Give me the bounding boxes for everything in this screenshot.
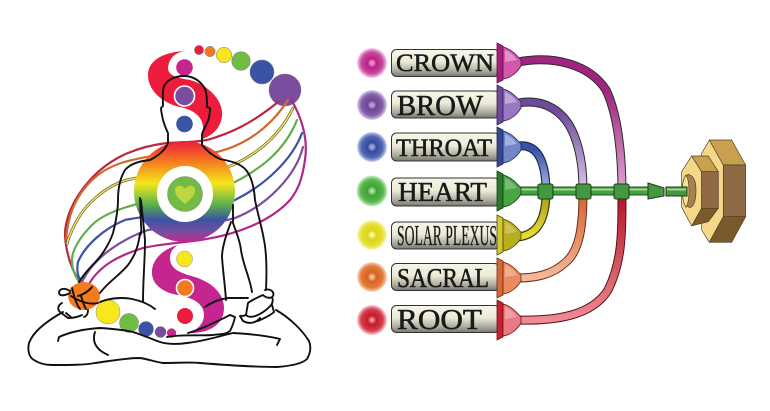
seated body outline xyxy=(28,76,310,367)
root chakra xyxy=(177,308,193,324)
sacral label bar xyxy=(392,264,500,290)
red upper S swirl xyxy=(148,51,222,139)
rainbow energy ribbons xyxy=(65,99,306,284)
row: solar plexus xyxy=(357,215,521,255)
sacral end cap xyxy=(497,258,521,298)
bead trail from hand xyxy=(96,300,176,338)
brow label: BROW xyxy=(397,90,484,122)
sacral label: SACRAL xyxy=(397,263,489,293)
row: root xyxy=(357,300,521,340)
solar plexus end cap xyxy=(497,215,521,255)
heart orb xyxy=(356,176,388,206)
icon: heart xyxy=(175,186,195,204)
crown end cap xyxy=(497,43,521,83)
rainbow chest circle xyxy=(134,141,235,242)
brow end cap xyxy=(497,85,521,125)
sacral chakra ring xyxy=(176,280,194,296)
crown orb xyxy=(357,48,387,78)
large nut xyxy=(702,140,746,242)
orange ball in hand xyxy=(68,282,100,310)
brow orb xyxy=(357,90,387,120)
collars and arrow fitting xyxy=(538,183,664,199)
throat label bar xyxy=(392,133,500,161)
row: throat xyxy=(357,127,521,167)
row: solar plexus: SOLAR PLEXUS xyxy=(397,221,497,252)
heart label bar xyxy=(392,178,500,206)
solar plexus chakra xyxy=(176,251,192,267)
row: crown xyxy=(357,43,521,83)
brass nut fitting xyxy=(682,140,746,242)
throat chakra xyxy=(176,116,193,132)
heart chakra disc xyxy=(168,176,202,212)
small nut xyxy=(682,156,718,226)
tube: brow to sacral xyxy=(518,102,583,278)
throat label: THROAT xyxy=(396,135,492,162)
throat orb xyxy=(357,132,387,162)
magenta crown chakra xyxy=(176,59,193,76)
trunk tip entering nut xyxy=(666,187,687,196)
solar plexus orb xyxy=(357,220,387,250)
heart end cap xyxy=(497,171,521,211)
crown label bar xyxy=(392,50,500,76)
root label: ROOT xyxy=(397,304,482,336)
main green trunk tube xyxy=(517,183,664,199)
row: sacral xyxy=(357,258,521,298)
root label bar xyxy=(392,306,500,332)
root end cap xyxy=(497,300,521,340)
magenta lower S swirl xyxy=(152,245,224,333)
root orb xyxy=(357,305,387,335)
crown label: CROWN xyxy=(396,50,494,77)
row: brow xyxy=(357,85,521,125)
brow chakra ring xyxy=(174,86,194,106)
heart label: HEART xyxy=(398,177,488,207)
brow label bar xyxy=(392,91,500,118)
connecting tubes xyxy=(517,60,664,320)
solar plexus label bar xyxy=(392,222,500,249)
tube: crown to root xyxy=(518,60,622,320)
row: heart xyxy=(356,171,521,211)
top chakra bead arc xyxy=(194,45,301,106)
tube: throat to solar plexus xyxy=(518,146,546,237)
throat end cap xyxy=(497,127,521,167)
white ring xyxy=(157,166,213,222)
chakra figure xyxy=(28,45,310,367)
sacral orb xyxy=(357,262,387,292)
